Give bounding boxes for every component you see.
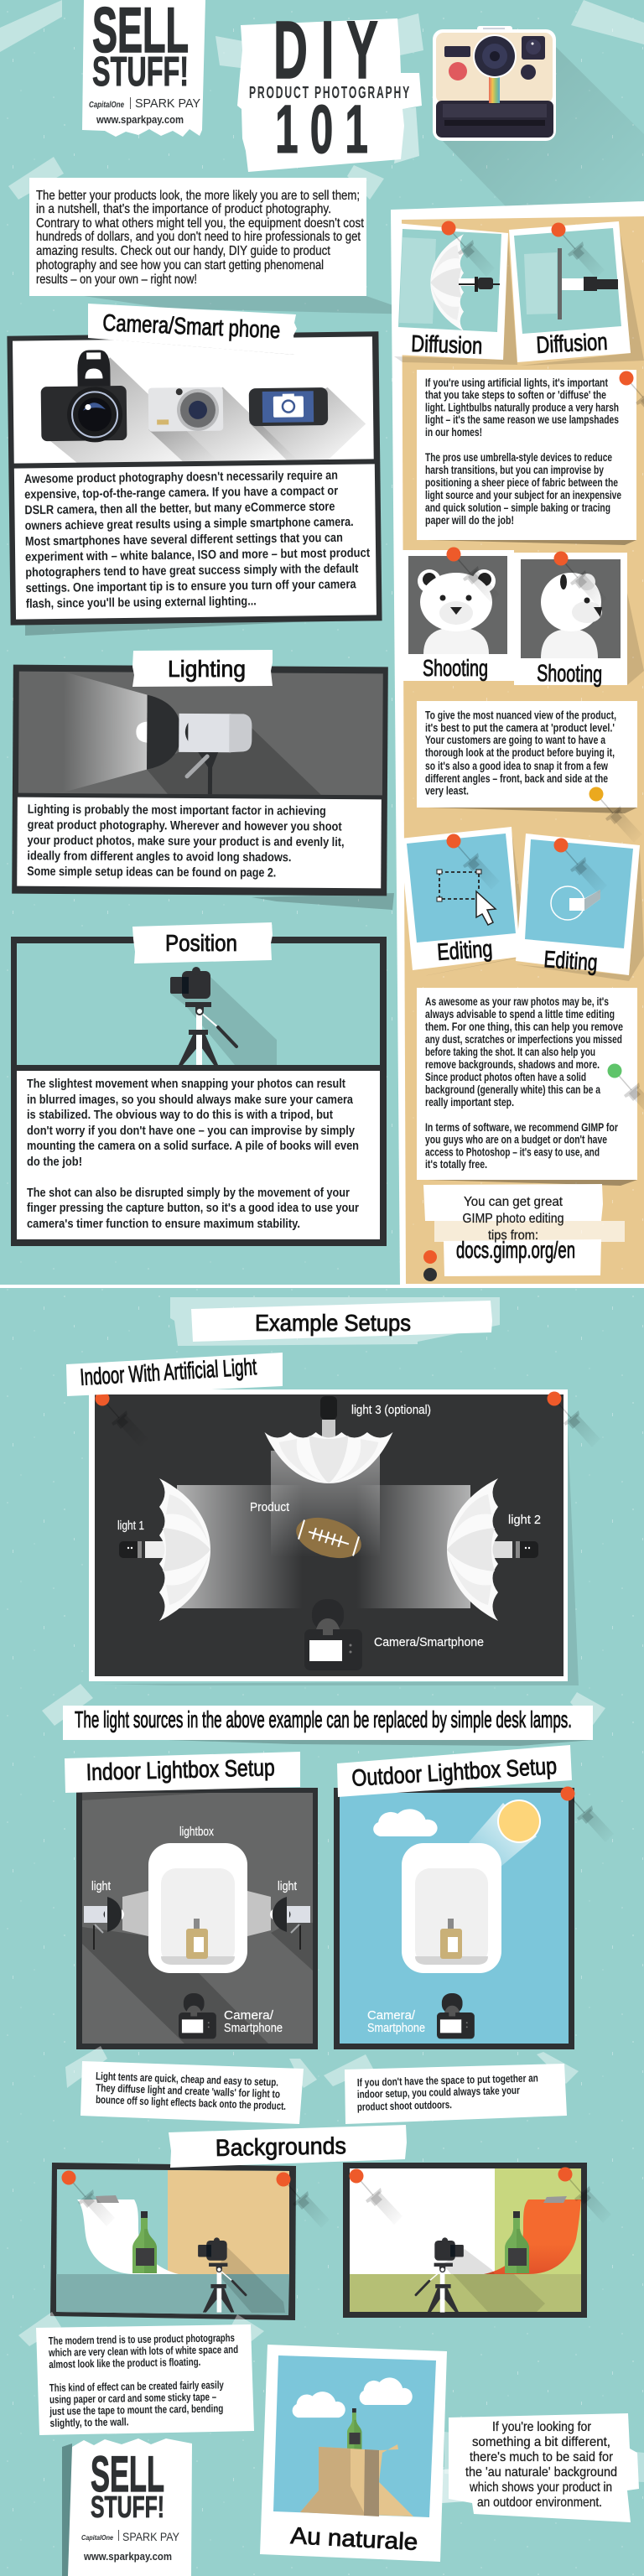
tape strip bbox=[96, 2195, 119, 2203]
caption card: light tents: bounce off so light eflects back onto the product. bbox=[96, 2093, 286, 2112]
polaroid: shooting side: Shooting bbox=[537, 660, 602, 687]
text: position copy: do the job! bbox=[27, 1155, 82, 1169]
pin: shooting right bbox=[553, 552, 607, 607]
text: position copy: camera's timer function to ensure maximum stability. bbox=[27, 1217, 300, 1231]
intro text card bbox=[29, 178, 419, 314]
text: camera copy: Awesome product photography doesn't necessarily require an bbox=[24, 468, 338, 486]
light beams bbox=[177, 1451, 470, 1608]
icon: light 3 umbrella bbox=[265, 1396, 392, 1483]
illustration: right light bbox=[247, 1891, 310, 1950]
label: camera smartphone: Smartphone bbox=[367, 2021, 425, 2035]
icon: green bottle bbox=[505, 2211, 529, 2273]
illustration: camera on tripod bbox=[198, 2237, 285, 2313]
tape note: au naturale copy: which shows your product in bbox=[469, 2480, 612, 2495]
panel: background white paper bbox=[50, 2163, 330, 2320]
text: lighting copy: great product photography. Wherever and however you shoot bbox=[28, 818, 342, 834]
tape strip bbox=[543, 2196, 567, 2203]
divider band between pages bbox=[0, 1285, 644, 1288]
pin: shooting card bbox=[589, 787, 642, 843]
icon: clouds bbox=[293, 2392, 345, 2418]
label: light 1: light 1 bbox=[117, 1519, 144, 1533]
tape note: desk lamps bbox=[42, 1684, 605, 1746]
icon: cloud bbox=[373, 1809, 438, 1836]
pin: left bbox=[349, 2168, 402, 2225]
label: light 2: light 2 bbox=[508, 1513, 541, 1527]
polaroid: editing eraser: Editing bbox=[543, 946, 599, 975]
intro text card: photography and see how you can start getting phenomenal bbox=[36, 258, 324, 273]
tape: top left corner bbox=[0, 0, 62, 52]
tape note: au naturale copy: there's much to be said for bbox=[470, 2450, 614, 2464]
text card: editing: really important step. bbox=[425, 1095, 514, 1109]
label: light 3: light 3 (optional) bbox=[351, 1403, 431, 1417]
polaroid: editing eraser bbox=[516, 834, 644, 981]
icon: football bbox=[291, 1510, 366, 1566]
text card: editing: it's totally free. bbox=[425, 1157, 487, 1171]
logo card: Sell Stuff top: www.sparkpay.com bbox=[96, 113, 184, 126]
logo card: Sell Stuff bottom bbox=[62, 2438, 192, 2576]
illustration: curved paper bbox=[77, 2199, 179, 2274]
illustration: studio light bbox=[63, 672, 322, 795]
intro text card: results – on your own – right now! bbox=[36, 273, 197, 287]
logo card: Sell Stuff top bbox=[82, 0, 205, 137]
text: position copy: The shot can also be disrupted simply by the movement of your bbox=[27, 1186, 350, 1200]
polaroid: au naturale: Au naturale bbox=[290, 2522, 418, 2555]
caption card: light tents: They diffuse light and create 'walls' for light to bbox=[96, 2081, 280, 2101]
title: DIY Product Photography 101: PRODUCT PHOTOGRAPHY bbox=[249, 84, 411, 102]
label: camera smartphone: Camera/ bbox=[224, 2008, 274, 2023]
tape note: GIMP tips bbox=[423, 1184, 625, 1276]
caption card: outdoors: product shoot outdoors. bbox=[357, 2098, 452, 2113]
text: lighting copy: Some simple setup ideas can be found on page 2. bbox=[27, 865, 276, 880]
text: position copy: finger pressing the capture button, so it's a good idea to use your bbox=[27, 1201, 359, 1215]
logo card: Sell Stuff bottom: SELL bbox=[91, 2446, 164, 2502]
label: right light: light bbox=[278, 1879, 298, 1893]
caption card: outdoors: indoor setup, you could always take your bbox=[357, 2084, 520, 2101]
icon: camera back bbox=[437, 1993, 475, 2038]
illustration: lightbox with bottle bbox=[402, 1843, 501, 1973]
text: lighting copy: ideally from different angles to avoid long shadows. bbox=[27, 849, 291, 865]
heading tape: outdoor lightbox setup bbox=[337, 1745, 572, 1797]
text: camera copy bbox=[24, 468, 371, 611]
label: camera smartphone bbox=[224, 2008, 283, 2035]
text: position copy: is stabilized. The obvious way to do this is with a tripod, but bbox=[27, 1108, 333, 1122]
logo card: Sell Stuff bottom: www.sparkpay.com bbox=[83, 2550, 172, 2563]
text card: diffusion: paper will do the job! bbox=[425, 513, 514, 527]
panel: lighting bbox=[12, 665, 394, 910]
text: camera copy: owners achieve great results using a simple smartphone camera. bbox=[25, 515, 354, 533]
label: camera smartphone: Smartphone bbox=[224, 2021, 283, 2035]
text card: modern trend: This kind of effect can be created fairly easily bbox=[49, 2378, 224, 2394]
illustration: camera on tripod bbox=[416, 2237, 545, 2313]
polaroid: shooting front bbox=[401, 550, 514, 681]
caption card: outdoors bbox=[324, 2052, 579, 2124]
pin: left bbox=[62, 2170, 115, 2226]
caption card: light tents: Light tents are quick, cheap and easy to setup. bbox=[96, 2070, 278, 2089]
illustration: left light bbox=[84, 1891, 148, 1950]
intro text card: in a nutshell, that's the importance of product photography. bbox=[36, 202, 331, 216]
label: camera smartphone: Camera/ bbox=[367, 2008, 416, 2023]
logo card: Sell Stuff bottom: CapitalOne bbox=[81, 2534, 113, 2542]
pin: GIMP note dark bbox=[423, 1268, 437, 1281]
tape note: au naturale copy: the 'au naturale' background bbox=[465, 2465, 617, 2480]
illustration: sun and beam bbox=[469, 1800, 541, 1867]
icon: light 2 umbrella bbox=[447, 1478, 538, 1621]
heading tape: position: Position bbox=[165, 930, 237, 956]
text: position copy: The slightest movement when snapping your photos can result bbox=[27, 1077, 345, 1091]
pin: shooting left bbox=[446, 547, 500, 603]
heading tape: camera / smart phone bbox=[88, 304, 297, 355]
tape note: au naturale copy: something a bit different, bbox=[472, 2435, 610, 2449]
pin: diffusion right bbox=[552, 223, 605, 278]
polaroid: diffusion umbrella bbox=[394, 223, 517, 365]
heading tape: outdoor lightbox setup: Outdoor Lightbox Setup bbox=[351, 1753, 558, 1791]
text: position copy: don't worry if you don't have one – you can improvise by simply bbox=[27, 1124, 356, 1138]
illustration: bottle on box bbox=[300, 2408, 413, 2516]
heading tape: position bbox=[132, 922, 273, 963]
text card: editing bbox=[417, 988, 637, 1186]
pin: right bbox=[558, 2167, 611, 2223]
illustration: camera on tripod bbox=[170, 967, 277, 1065]
panel: background coloured paper bbox=[343, 2163, 611, 2318]
text: camera copy: settings. One important tip is to ensure you turn off your camera bbox=[25, 577, 356, 595]
heading tape: example setups bbox=[170, 1297, 500, 1346]
polaroid: shooting side bbox=[514, 553, 644, 687]
panel: indoor with artificial light bbox=[89, 1389, 600, 1685]
icon: green bottle bbox=[132, 2211, 157, 2273]
title: DIY Product Photography 101: D I Y bbox=[273, 4, 378, 96]
icon: camera back bbox=[179, 1993, 216, 2038]
illustration: lightbox with bottle bbox=[148, 1843, 247, 1973]
polaroid: diffusion fabric: Diffusion bbox=[536, 329, 608, 358]
label: product: Product bbox=[250, 1500, 290, 1514]
intro text card: hundreds of dollars, and you don't need to hire professionals to get bbox=[36, 230, 361, 244]
icon: DSLR camera bbox=[40, 349, 218, 463]
text: camera copy: Most smartphones have several different settings that you can bbox=[25, 531, 343, 548]
label: camera/smartphone: Camera/Smartphone bbox=[374, 1635, 484, 1649]
text card: editing: Since product photos often have a solid bbox=[425, 1070, 586, 1083]
heading tape: backgrounds: Backgrounds bbox=[216, 2132, 346, 2161]
tape note: au naturale copy bbox=[442, 2413, 644, 2522]
polaroid: diffusion umbrella: Diffusion bbox=[411, 330, 483, 359]
text: camera copy: DSLR camera, then all the better, but many eCommerce store bbox=[24, 500, 335, 517]
heading tape: camera / smart phone: Camera/Smart phone bbox=[102, 309, 281, 343]
label: lightbox: lightbox bbox=[179, 1825, 214, 1839]
tape note: GIMP tips: docs.gimp.org/en bbox=[456, 1237, 575, 1263]
pin: outdoor bbox=[560, 1786, 614, 1842]
text card: modern trend: just use the tape to mount the card, bending bbox=[49, 2402, 223, 2418]
panel: outdoor lightbox bbox=[334, 1786, 614, 2049]
panel: indoor lightbox bbox=[76, 1788, 318, 2049]
pin: diffusion card bbox=[619, 371, 644, 427]
pin: right bbox=[277, 2172, 330, 2228]
logo card: Sell Stuff top: SPARK PAY bbox=[135, 96, 200, 111]
text: camera copy: experiment with – white balance, ISO and more – but most product bbox=[25, 546, 370, 564]
text: camera copy: flash, since you'll be using external lighting... bbox=[26, 594, 257, 611]
polaroid: editing selection bbox=[400, 827, 528, 977]
logo card: Sell Stuff bottom: STUFF! bbox=[91, 2490, 164, 2524]
intro text card: amazing results. Check out our handy, DIY guide to product bbox=[36, 244, 330, 258]
polaroid: diffusion fabric bbox=[509, 221, 644, 366]
polaroid: editing selection: Editing bbox=[436, 935, 493, 965]
logo card: Sell Stuff bottom: SPARK PAY bbox=[122, 2530, 180, 2543]
pin: setup left bbox=[96, 1392, 148, 1447]
text: position copy: mounting the camera on a solid surface. A pile of books will even bbox=[27, 1139, 359, 1153]
intro text card: Contrary to what others might tell you, the equipment doesn't cost bbox=[36, 216, 364, 231]
tape note: GIMP tips: You can get great bbox=[464, 1195, 564, 1209]
text card: modern trend bbox=[18, 2312, 264, 2435]
heading tape: backgrounds bbox=[169, 2125, 407, 2168]
caption card: outdoors: If you don't have the space to put together an bbox=[357, 2071, 538, 2089]
light shadows bbox=[82, 1793, 313, 2044]
icon: light 1 umbrella bbox=[119, 1478, 210, 1621]
polaroid: au naturale bbox=[260, 2345, 447, 2562]
heading tape: indoor with artificial light bbox=[66, 1353, 283, 1396]
text card: modern trend: using paper or card and some sticky tape – bbox=[49, 2391, 216, 2406]
text card: diffusion: in our homes! bbox=[425, 425, 482, 439]
pin: diffusion left bbox=[441, 221, 495, 277]
text: lighting copy: Lighting is probably the most important factor in achieving bbox=[28, 802, 326, 818]
label: left light: light bbox=[91, 1879, 112, 1893]
icon: compact camera bbox=[148, 386, 298, 462]
text: camera copy: photographers tend to have great success simply with the default bbox=[25, 562, 358, 579]
icon: camera back bbox=[304, 1599, 362, 1670]
text: position copy: in blurred images, so you should always make sure your camera bbox=[27, 1093, 354, 1107]
panel: camera / smart phone bbox=[7, 331, 382, 636]
text: lighting copy bbox=[27, 802, 345, 880]
text card: modern trend: which are very clean with lots of white space and bbox=[48, 2343, 238, 2359]
tape note: GIMP tips: GIMP photo editing bbox=[463, 1212, 564, 1226]
text card: shooting bbox=[417, 701, 637, 813]
text: position copy bbox=[27, 1077, 359, 1231]
text: camera copy: expensive, top-of-the-range camera. If you have a compact or bbox=[24, 484, 338, 501]
tape note: au naturale copy: an outdoor environment. bbox=[477, 2496, 602, 2510]
heading tape: indoor lightbox setup bbox=[65, 1752, 300, 1793]
title: DIY Product Photography 101: 1 0 1 bbox=[275, 91, 368, 168]
icon: instant camera bbox=[433, 26, 644, 252]
text card: modern trend: slightly, to the wall. bbox=[49, 2415, 129, 2429]
caption card: light tents bbox=[65, 2046, 317, 2124]
pin: editing left bbox=[446, 834, 500, 890]
label: camera smartphone bbox=[367, 2008, 425, 2035]
logo card: Sell Stuff top: STUFF! bbox=[92, 49, 189, 95]
text card: modern trend: The modern trend is to use product photographs bbox=[49, 2331, 235, 2347]
tape note: GIMP tips: tips from: bbox=[488, 1228, 538, 1243]
panel: position bbox=[11, 937, 387, 1246]
title: DIY Product Photography 101 bbox=[216, 4, 423, 172]
tape: top right corner bbox=[571, 0, 644, 44]
text card: modern trend: almost look like the product is floating. bbox=[49, 2355, 200, 2371]
panel: cork board column bbox=[391, 201, 644, 1285]
heading tape: lighting: Lighting bbox=[168, 656, 246, 682]
pin: GIMP note red bbox=[423, 1250, 437, 1264]
text card: diffusion bbox=[417, 370, 636, 545]
pin: editing right bbox=[553, 839, 607, 894]
heading tape: indoor with artificial light: Indoor With Artificial Light bbox=[79, 1353, 257, 1390]
pin: editing card bbox=[607, 1063, 644, 1119]
tape: right of intro bbox=[347, 165, 384, 200]
tape: left of intro bbox=[8, 157, 64, 200]
pin: setup right bbox=[547, 1392, 600, 1447]
logo card: Sell Stuff top: CapitalOne bbox=[89, 101, 124, 110]
heading tape: lighting bbox=[132, 650, 273, 687]
illustration: curved orange paper bbox=[484, 2199, 581, 2274]
heading tape: indoor lightbox setup: Indoor Lightbox Setup bbox=[86, 1754, 275, 1785]
polaroid: shooting front: Shooting bbox=[423, 655, 488, 681]
intro text card: The better your products look, the more likely you are to sell them; bbox=[36, 189, 360, 203]
heading tape: example setups: Example Setups bbox=[255, 1310, 411, 1336]
icon: smartphone bbox=[249, 387, 366, 460]
text card: shooting: very least. bbox=[425, 783, 469, 797]
tape note: au naturale copy: If you're looking for bbox=[492, 2420, 592, 2434]
text: lighting copy: your product photos, make sure your product is and evenly lit, bbox=[28, 834, 345, 849]
